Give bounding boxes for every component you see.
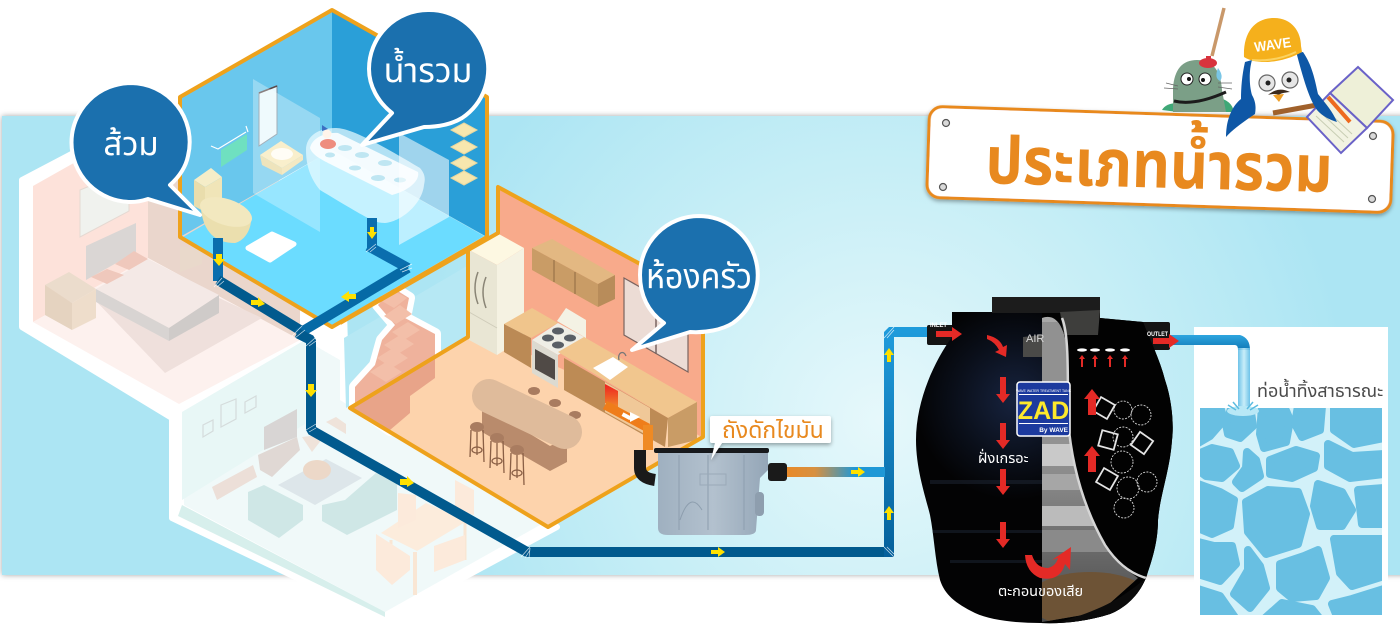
kitchen pipe after grease trap — [785, 467, 885, 477]
label: grease trap: ถังดักไขมัน — [722, 417, 824, 443]
square bio media — [1093, 397, 1153, 490]
label: grease trap — [710, 416, 831, 460]
stools behind table — [528, 387, 581, 419]
living room — [178, 340, 540, 617]
bathroom front edge line — [340, 233, 498, 323]
nozzles — [1077, 348, 1130, 352]
bathroom floor — [183, 150, 484, 325]
bathroom right wall — [332, 10, 487, 237]
tank body — [916, 297, 1173, 623]
bedroom — [33, 103, 300, 404]
mascot: penguin tool belt — [1273, 105, 1317, 113]
riser pipe to tank — [889, 332, 935, 557]
outlet pipe and water stream — [1167, 335, 1259, 416]
public drain white panel — [1194, 327, 1388, 620]
long counter and cabinets — [558, 337, 697, 447]
ZAD badge: ZAD — [1018, 397, 1069, 425]
kitchen table — [482, 396, 567, 471]
left counter — [504, 308, 558, 368]
towel rail and towel — [211, 126, 248, 167]
trap lid — [654, 448, 769, 453]
inlet label: INLET — [930, 323, 947, 329]
left elbow — [640, 450, 655, 480]
kitchen — [350, 187, 703, 527]
bed — [86, 223, 219, 341]
wall pictures — [203, 396, 256, 437]
rug and coffee table — [278, 459, 362, 505]
tank neck — [992, 297, 1100, 313]
air label: AIR — [1026, 333, 1044, 345]
glass partition — [253, 79, 320, 232]
bathroom pipes — [218, 218, 408, 334]
cutaway interior — [1042, 316, 1146, 622]
toilet — [194, 168, 256, 243]
title sign — [927, 106, 1393, 213]
bathroom — [180, 10, 487, 325]
house: faded ground floor rooms — [22, 97, 557, 620]
bathroom left wall — [180, 10, 332, 237]
stairs seen through floor — [352, 358, 435, 430]
upper cabinets — [532, 239, 615, 307]
helmet: WAVE — [1253, 34, 1292, 55]
outlet label: OUTLET — [1147, 332, 1168, 338]
bio media — [1111, 401, 1157, 518]
sludge — [1042, 572, 1135, 621]
glasses — [1259, 72, 1298, 91]
right wing — [1297, 52, 1337, 122]
right glass partition — [399, 133, 449, 245]
person in tub — [320, 125, 336, 149]
dining table — [376, 480, 474, 595]
fridge — [469, 233, 524, 355]
kitchen floor — [350, 337, 703, 527]
septic tank — [916, 297, 1182, 630]
light-blue gap behind stairs — [344, 266, 467, 408]
ZAD badge: By WAVE — [1039, 427, 1069, 434]
tank dome — [1060, 310, 1100, 335]
side tables — [302, 417, 346, 452]
bath mat — [248, 234, 294, 260]
pipe corner creases — [214, 244, 894, 558]
moustache and beak — [1268, 90, 1290, 102]
window — [624, 278, 688, 372]
water pool — [1198, 406, 1384, 619]
bathtub — [306, 125, 425, 223]
side fitting — [755, 492, 764, 516]
mascot: penguin — [1226, 18, 1350, 137]
shade bands — [930, 480, 1042, 563]
air vent block — [1023, 335, 1042, 357]
right coupling — [768, 463, 787, 481]
grease trap — [640, 448, 787, 535]
mascot: seal with plunger — [1162, 8, 1234, 112]
ZAD badge: WAVE WATER TREATMENT TANK — [1016, 389, 1072, 393]
bubble: kitchen: ห้องครัว — [646, 257, 752, 296]
kitchen sink — [593, 353, 628, 380]
bubble: bath water — [362, 10, 488, 145]
shelves — [451, 123, 477, 185]
bathroom orange frame — [180, 10, 487, 327]
white house silhouette — [22, 97, 557, 620]
background panel — [2, 116, 1400, 575]
left wing — [1226, 60, 1256, 137]
stairs — [355, 288, 435, 430]
drain pipe — [605, 405, 648, 450]
book strap — [1328, 97, 1350, 122]
kitchen orange frame — [350, 187, 703, 527]
mirror — [259, 86, 277, 146]
trap body — [658, 452, 768, 535]
drain pipes — [218, 218, 935, 557]
open book — [1307, 67, 1393, 153]
tv unit — [258, 409, 300, 477]
title: ประเภทน้ำรวม — [985, 114, 1334, 206]
main sewer pipe — [297, 333, 885, 552]
sofas — [212, 465, 397, 538]
peel — [1060, 578, 1146, 622]
bubble: toilet: ส้วม — [103, 125, 159, 162]
ZAD badge — [1016, 382, 1072, 436]
label: public drain: ท่อน้ำทิ้งสาธารณะ — [1257, 378, 1383, 401]
stools — [470, 422, 524, 485]
wash basin — [260, 141, 303, 175]
bubble: kitchen — [632, 216, 758, 350]
tank label: sludge: ตะกอนของเสีย — [998, 584, 1083, 600]
red flow arrows — [936, 327, 1179, 579]
tank label: septic side: ฝั่งเกรอะ — [978, 449, 1029, 467]
bedroom window — [80, 170, 129, 237]
yellow flow arrows — [213, 227, 894, 557]
sign screws — [940, 120, 1376, 202]
stove — [532, 308, 586, 388]
inlet and outlet sockets — [927, 325, 957, 345]
nightstand — [45, 272, 96, 330]
bubble: toilet — [72, 83, 200, 215]
bubble: bath water: น้ำรวม — [384, 47, 472, 90]
